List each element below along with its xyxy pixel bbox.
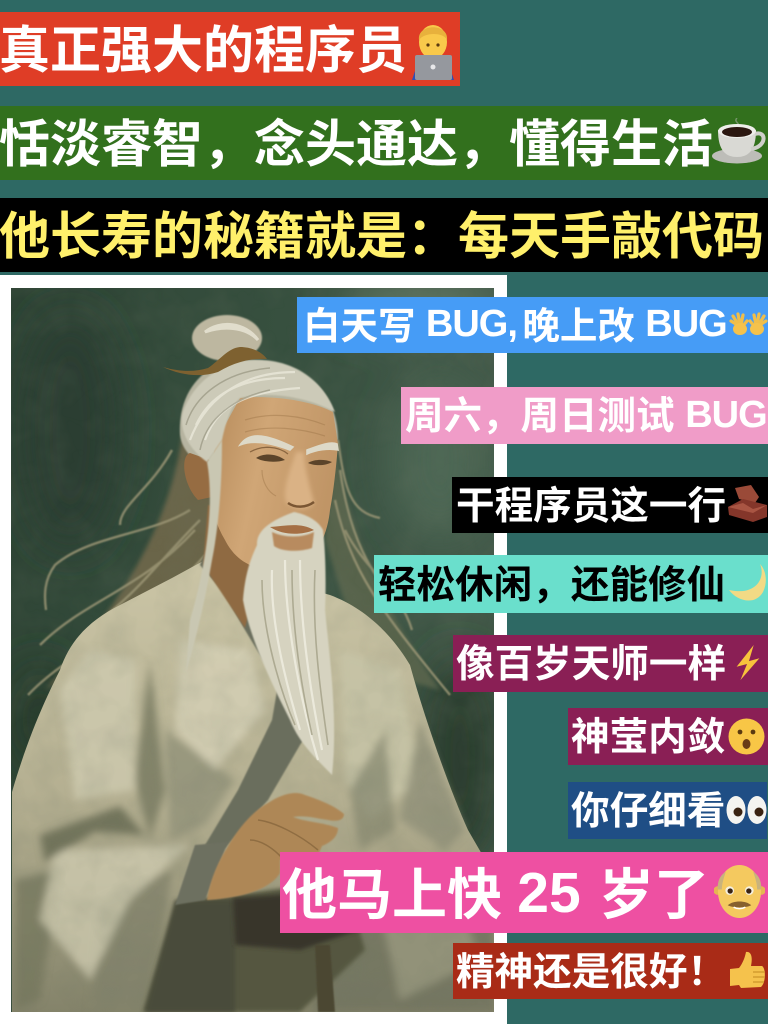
- subtitle text: 恬淡睿智，念头通达，懂得生活: [0, 116, 713, 173]
- text: still energetic line: 精神还是很好！: [456, 950, 726, 994]
- heading text: 真正强大的程序员: [0, 22, 407, 79]
- text: bug line: 白天写 晚上改: [303, 305, 635, 347]
- painting: white-haired elder in robe: [11, 288, 494, 1012]
- ear: [184, 453, 212, 500]
- icon: coffee cup: [712, 118, 766, 164]
- text: relax line: 轻松休闲，还能修仙: [378, 564, 725, 606]
- bun: [192, 315, 262, 361]
- beard: [243, 512, 334, 775]
- text: bug line: BUG,: [426, 303, 517, 345]
- icon: open hands: [729, 312, 768, 335]
- collar band: [200, 545, 330, 848]
- neck: [203, 505, 262, 628]
- subtitle: green bar: [0, 106, 768, 180]
- text: look closely line: 你仔细看: [571, 790, 725, 833]
- eyebrows: [240, 436, 293, 450]
- text: age line: 25: [517, 861, 581, 925]
- icon: programmer with laptop: [412, 25, 454, 80]
- icon: old man face: [714, 865, 765, 918]
- text: weekend line: BUG: [685, 394, 767, 436]
- callout: purple bar: [453, 635, 768, 692]
- robe body: [12, 560, 494, 1012]
- callout: black bar: [452, 477, 768, 533]
- icon: thumbs up: [730, 952, 765, 988]
- subtitle: black bar with yellow text: [0, 198, 768, 272]
- hanging hair strand: [186, 440, 222, 672]
- text: tianshi line: 像百岁天师一样: [456, 643, 726, 686]
- subtitle text: 他长寿的秘籍就是：每天手敲代码: [0, 208, 764, 265]
- face: [211, 397, 338, 570]
- head: hair back: [180, 360, 338, 470]
- callout: purple bar 2: [568, 708, 768, 765]
- painterly texture overlay: [11, 288, 494, 1012]
- callout: blue bar: [297, 297, 768, 353]
- icon: lightning bolt: [736, 645, 760, 680]
- icon: bricks: [728, 485, 767, 522]
- callout: teal bar: [374, 555, 768, 613]
- text: programmer line: 干程序员这一行: [456, 484, 726, 528]
- panel: portrait photo with white frame: [0, 275, 507, 1024]
- long hair behind: [28, 436, 450, 695]
- hair tie: [163, 347, 267, 375]
- robe folds: [15, 640, 494, 1012]
- callout: large pink bar: [280, 852, 768, 933]
- eyes: [256, 454, 285, 462]
- dark belly and belt: [143, 880, 365, 1012]
- icon: eyes: [726, 796, 766, 824]
- sleeve cuff: [175, 842, 228, 905]
- text: bug line: BUG: [645, 303, 727, 345]
- icon: surprised face: [728, 718, 764, 754]
- hand: [207, 793, 344, 900]
- icon: crescent moon: [729, 564, 766, 600]
- title: red headline bar: [0, 12, 460, 86]
- callout: rust bar: [453, 943, 768, 999]
- text: age line: 他马上快 岁了: [282, 864, 709, 926]
- callout: navy bar: [568, 782, 767, 839]
- text: spirit line: 神莹内敛: [571, 716, 725, 759]
- text: weekend line: 周六，周日测试: [405, 395, 675, 438]
- callout: pink bar: [401, 387, 768, 444]
- hair front: [182, 360, 335, 462]
